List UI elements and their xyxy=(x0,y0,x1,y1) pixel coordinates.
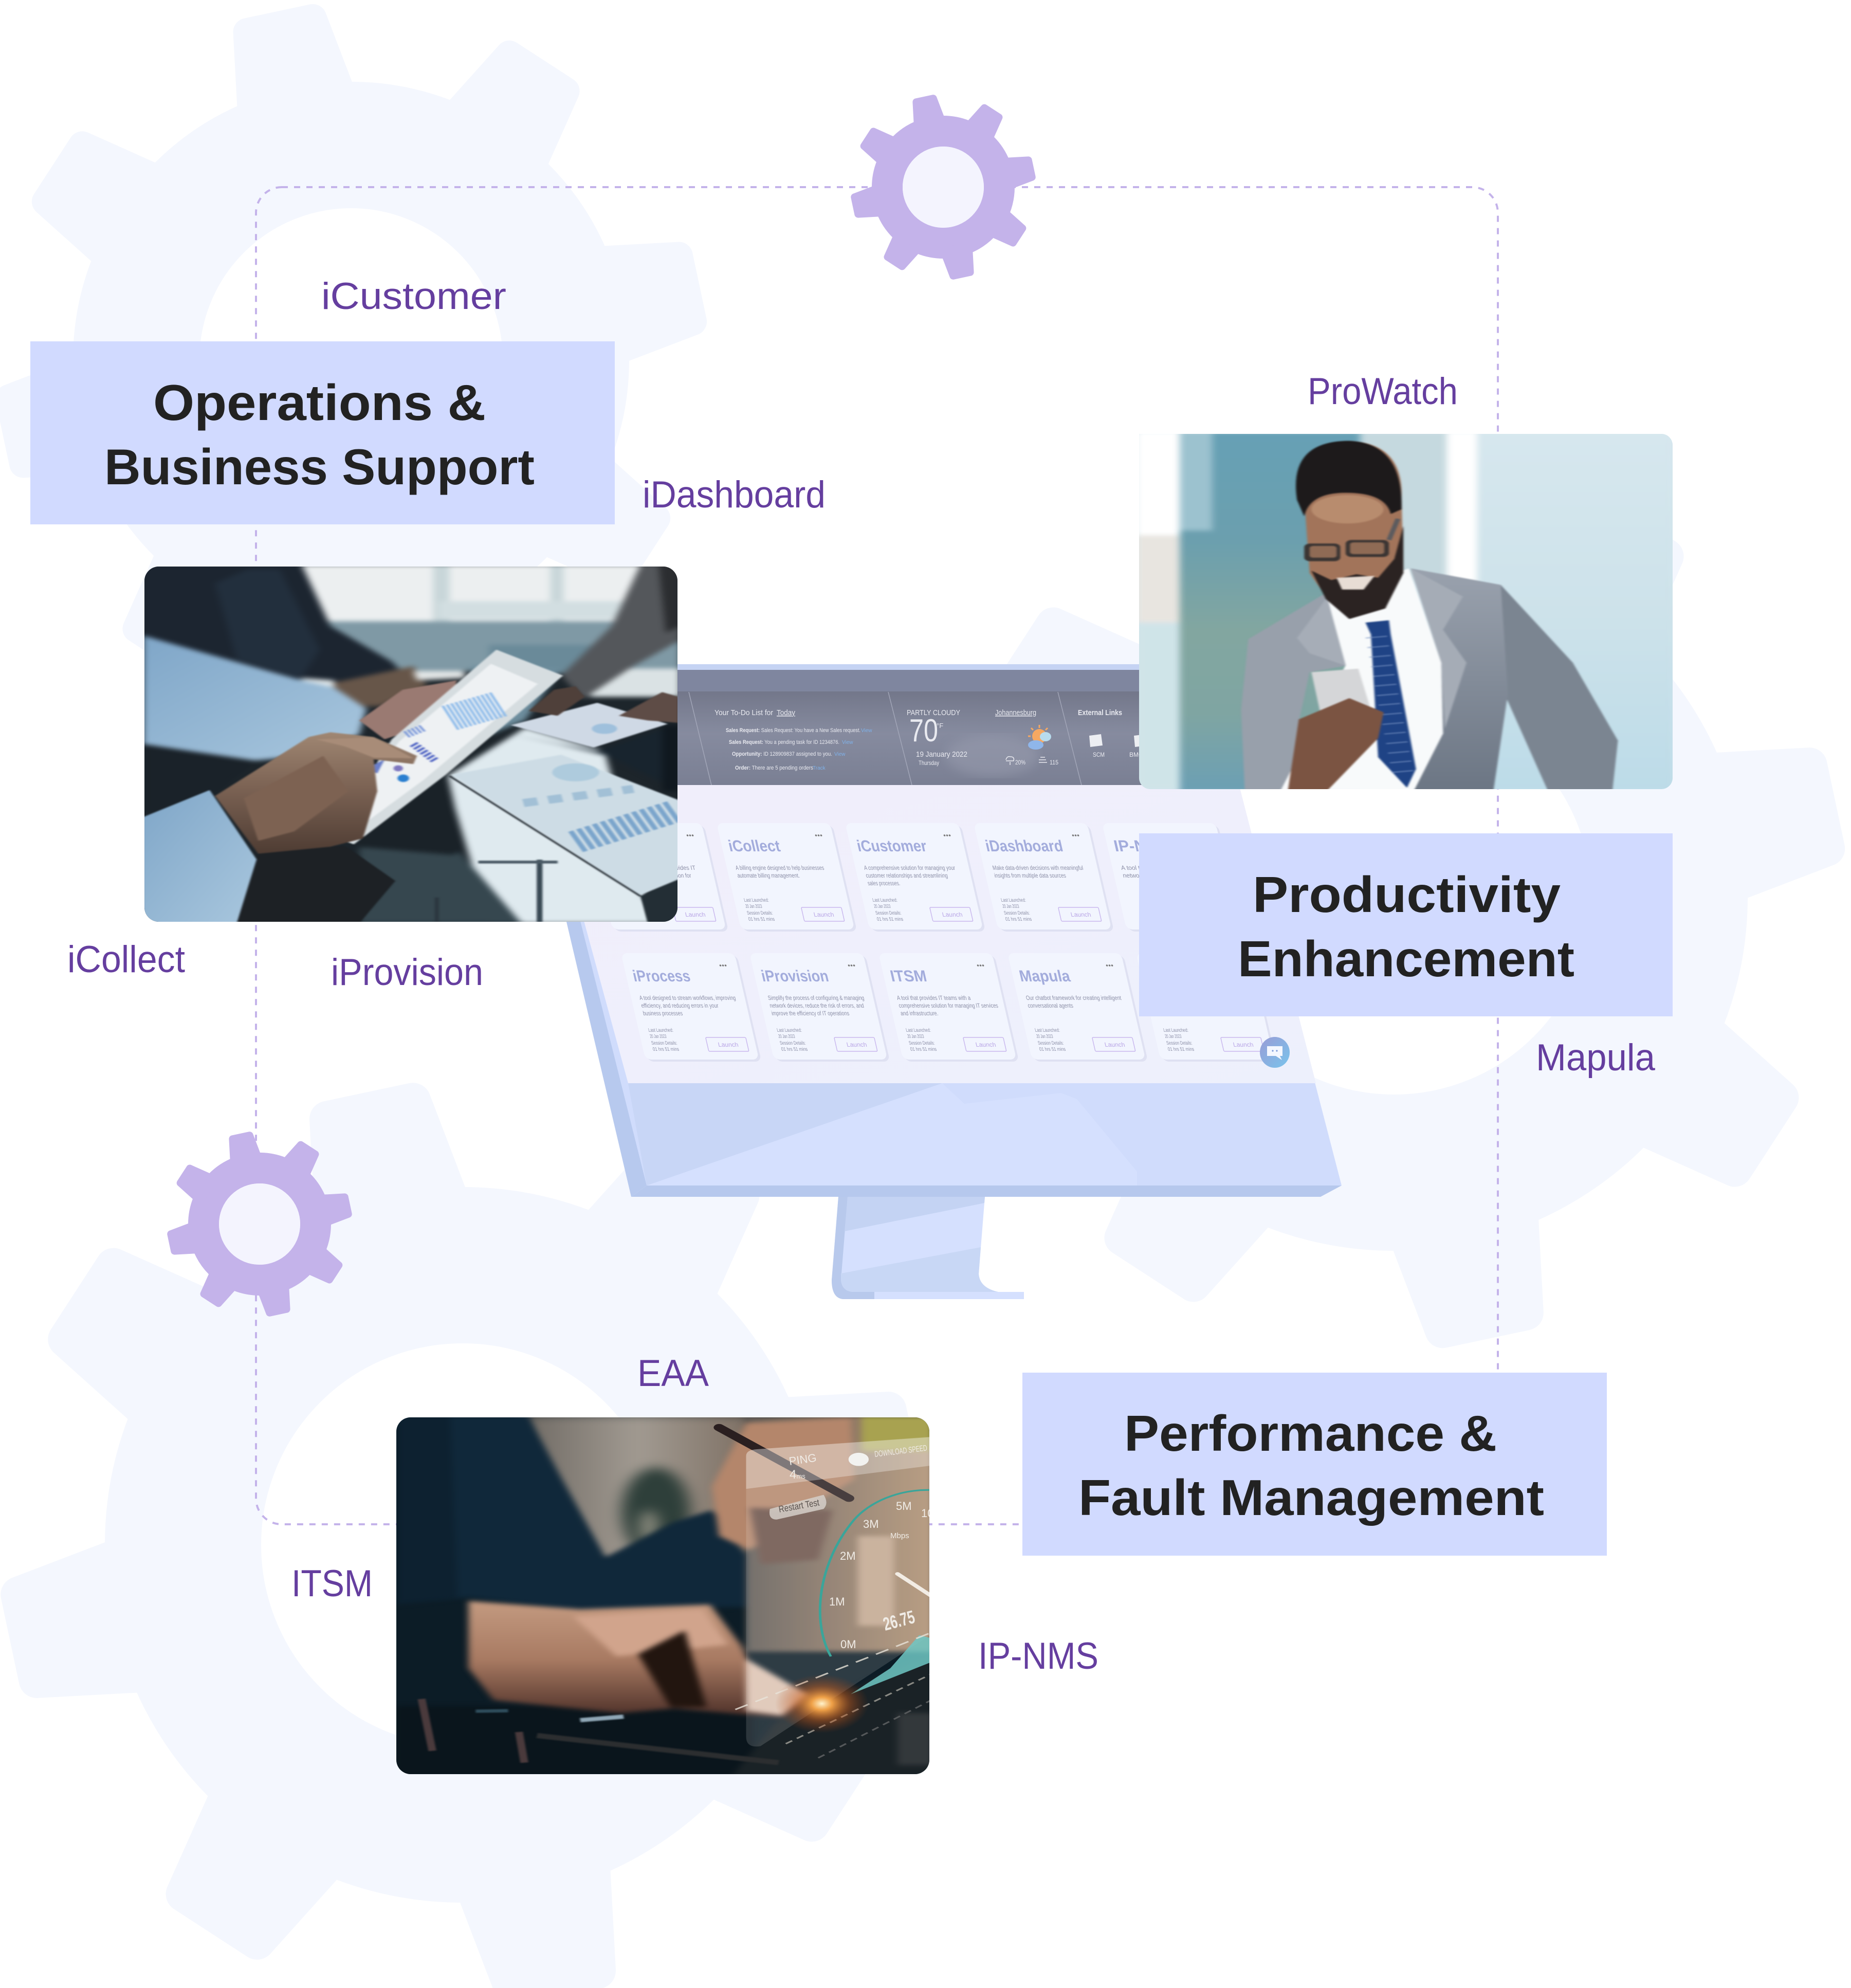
monitor front shaded facet xyxy=(628,1083,942,1185)
app card: Mapula: Session Details: xyxy=(1037,1041,1065,1046)
app card: iDashboard xyxy=(974,823,1114,932)
app card: iProcess: Session Details: xyxy=(651,1041,678,1046)
label: Mapula: Mapula xyxy=(1536,1037,1655,1079)
monitor illustration xyxy=(514,664,1342,1299)
app card: Mapula: Last Launched: xyxy=(1034,1028,1060,1033)
app card: iProvision: Last Launched: xyxy=(776,1028,802,1033)
app card: iDashboard: insights from multiple data sources xyxy=(994,872,1067,879)
app card: IP-NMS xyxy=(1102,823,1243,932)
speed test overlay text: 5M xyxy=(896,1500,912,1512)
app card: IP-NMS: IP-NMS xyxy=(1112,837,1172,855)
app card: iProvision: Session Details: xyxy=(779,1041,807,1046)
app card: ProWatch: Last Launched: xyxy=(1163,1028,1189,1033)
app card: iProvision: 01 hrs 51 mins xyxy=(781,1047,808,1052)
dashboard header xyxy=(677,664,1142,786)
label: iCollect: iCollect xyxy=(67,939,185,980)
app card: ITSM: Launch xyxy=(975,1041,997,1048)
app card: iCustomer: Launch xyxy=(941,911,963,918)
label: iCustomer: iCustomer xyxy=(321,276,506,317)
dashboard header: SCM xyxy=(1093,751,1105,758)
app card: ProWatch xyxy=(1136,953,1277,1062)
app card: ProWatch: 01 hrs 51 mins xyxy=(1167,1047,1195,1052)
app card: iProvision: improve the efficiency of IT operations xyxy=(771,1010,850,1017)
app card: ITSM: ITSM xyxy=(888,967,928,985)
app card: Mapula: Launch xyxy=(1104,1041,1126,1048)
app card: iCustomer xyxy=(856,826,984,932)
dashboard header: Track xyxy=(813,765,826,771)
app card: iProcess: Launch xyxy=(717,1041,739,1048)
app card: iCollect: Launch xyxy=(813,911,835,918)
speed test overlay text: 4ms xyxy=(790,1468,805,1482)
app card: EAA: Launch xyxy=(684,911,706,918)
dashboard header: Thursday xyxy=(919,759,939,767)
app card: iProvision: iProvision xyxy=(759,967,830,985)
app card: iCollect: A billing engine designed to help businesses xyxy=(735,864,825,871)
app card: Mapula: Our chatbot framework for creating intelligent xyxy=(1025,994,1122,1001)
dashboard header: View xyxy=(861,728,872,734)
app card: Mapula: 20 Jan 2023 xyxy=(1036,1034,1054,1039)
dashboard header: Today xyxy=(777,708,795,717)
app card: iProcess: 01 hrs 51 mins xyxy=(652,1047,680,1052)
app card: iProcess: A tool designed to stream workflows, improving xyxy=(638,994,737,1001)
speed test overlay text: 26.75 xyxy=(881,1606,917,1635)
heading box: Operations & Business Support: Business Support xyxy=(104,439,535,495)
app card: ITSM xyxy=(878,953,1019,1062)
monitor front lighter facet xyxy=(647,1083,1137,1185)
label: iProvision: iProvision xyxy=(331,952,483,993)
app card: ProWatch: Session Details: xyxy=(1166,1041,1193,1046)
app card: iCustomer: 01 hrs 51 mins xyxy=(876,917,904,922)
icon: gear left xyxy=(170,1135,349,1314)
heading box: Operations & Business Support: Operations & xyxy=(153,374,486,431)
app card: iProcess: iProcess xyxy=(631,967,692,985)
app card: Mapula: Mapula xyxy=(1017,967,1072,985)
app card: ProWatch: 20 Jan 2023 xyxy=(1164,1034,1182,1039)
app card: iCollect: iCollect xyxy=(726,837,782,855)
heading box: Performance & Fault Management: Fault Management xyxy=(1078,1469,1544,1526)
app card: ProWatch: ProWatch xyxy=(1146,967,1224,985)
app card: iDashboard: Session Details: xyxy=(1003,910,1031,916)
app card: iCollect: Session Details: xyxy=(746,910,774,916)
dashboard header: Sales Request: You a pending task for ID 1234876. xyxy=(729,739,839,745)
heading box: Performance & Fault Management: Performance & xyxy=(1124,1405,1497,1462)
app card: Mapula: 01 hrs 51 mins xyxy=(1039,1047,1066,1052)
app card: iDashboard: 01 hrs 51 mins xyxy=(1005,917,1032,922)
icon: weather xyxy=(1028,725,1051,750)
app card: iDashboard: Make data-driven decisions with meaningful xyxy=(992,864,1084,871)
app card: iCustomer: iCustomer xyxy=(855,837,928,855)
app card: EAA xyxy=(616,826,727,932)
speed test overlay text: 1M xyxy=(829,1595,845,1608)
app card: iDashboard: Last Launched: xyxy=(1000,898,1027,903)
dashboard header: Opportunity: ID 128909837 assigned to you. xyxy=(732,751,832,757)
app card: ITSM: 01 hrs 51 mins xyxy=(910,1047,937,1052)
speed test overlay text: PING xyxy=(788,1451,817,1468)
speed test overlay text: 0M xyxy=(840,1638,856,1651)
app card: iProcess xyxy=(621,953,762,1062)
app card: iProcess: 20 Jan 2023 xyxy=(649,1034,667,1039)
background gear: bottom left xyxy=(14,1097,911,1988)
app card: iDashboard: iDashboard xyxy=(983,837,1065,855)
dashboard header: 19 January 2022 xyxy=(916,750,967,759)
dashboard header: 70 xyxy=(909,713,938,749)
app card: iCollect xyxy=(728,826,856,932)
monitor stand xyxy=(832,1197,1024,1299)
dashboard header: View xyxy=(842,740,853,745)
app card: ITSM: and infrastructure. xyxy=(900,1010,939,1017)
monitor front face xyxy=(516,665,1342,1185)
app card: iCustomer: sales processes. xyxy=(867,880,901,887)
app card: EAA: business xyxy=(610,880,648,887)
app card: Mapula: conversational agents xyxy=(1027,1002,1074,1009)
app card: iProcess: business processes xyxy=(642,1010,684,1017)
app card: iCollect: 20 Jan 2023 xyxy=(745,904,763,909)
dashboard header: °F xyxy=(937,722,943,729)
app card: iCustomer: Last Launched: xyxy=(872,898,898,903)
app card: iProvision xyxy=(749,953,890,1062)
app card: EAA: A tool that simplifies and provides IT xyxy=(606,864,697,871)
label: IP-NMS: IP-NMS xyxy=(978,1635,1098,1677)
screen background xyxy=(584,785,1315,1083)
photo: man in suit using smartphone xyxy=(1137,431,1676,793)
dashboard header: Johannesburg xyxy=(995,708,1036,717)
app card: ProWatch: Launch xyxy=(1232,1041,1254,1048)
app card: iCollect: 01 hrs 51 mins xyxy=(748,917,775,922)
app card: iProvision: network devices, reduce the risk of errors, and xyxy=(769,1002,865,1009)
speed test overlay text: 3M xyxy=(863,1518,879,1530)
app card: iCustomer: 20 Jan 2023 xyxy=(873,904,891,909)
dashboard header: Sales Request: Sales Request: You have a New Sales request. xyxy=(726,727,860,734)
monitor screen xyxy=(584,664,1315,1083)
app card: ITSM: A tool that provides IT teams with a xyxy=(896,994,972,1001)
app card: ITSM: comprehensive solution for managing IT services xyxy=(898,1002,999,1009)
photo: team reviewing charts on tablet xyxy=(143,564,680,923)
app card: ITSM: Session Details: xyxy=(908,1041,936,1046)
icon: gear top xyxy=(854,98,1033,277)
app card: IP-NMS: network xyxy=(1122,872,1146,879)
app card: iProcess: efficiency, and reducing errors in your xyxy=(640,1002,719,1009)
dashboard header: PARTLY CLOUDY xyxy=(907,708,960,717)
background gear: right xyxy=(957,460,1831,1335)
speed test overlay text: 2M xyxy=(840,1549,856,1562)
app card: Mapula xyxy=(1007,953,1148,1062)
dashed connector loop xyxy=(256,187,1498,1524)
speed test overlay text: DOWNLOAD SPEED xyxy=(874,1444,928,1459)
app card: EAA: enterprise application automation for xyxy=(608,872,692,879)
icon: chat bubble xyxy=(1260,1037,1290,1068)
heading box: Productivity Enhancement: Productivity xyxy=(1253,866,1561,923)
dashboard header: Order: There are 5 pending orders xyxy=(735,765,813,771)
dashboard header: BMC xyxy=(1129,751,1143,758)
dashboard header: External Links xyxy=(1078,708,1122,717)
app card: iDashboard: 20 Jan 2023 xyxy=(1002,904,1020,909)
app card: iProvision: Simplify the process of configuring & managing xyxy=(767,994,865,1001)
heading box: Performance & Fault Management xyxy=(1022,1373,1607,1556)
app card: iCustomer: A comprehensive solution for managing your xyxy=(863,864,956,871)
app card: iCustomer: Session Details: xyxy=(875,910,902,916)
speed test overlay text xyxy=(778,1444,933,1651)
label: iDashboard: iDashboard xyxy=(643,474,826,516)
heading box: Productivity Enhancement: Enhancement xyxy=(1238,931,1574,987)
app card: iDashboard: Launch xyxy=(1070,911,1092,918)
app card: EAA: EAA xyxy=(598,837,636,855)
dashboard header: Your To-Do List for xyxy=(714,708,773,717)
dashboard header: 115 xyxy=(1050,759,1058,766)
photo: hands on laptop with speed test overlay xyxy=(396,1413,933,1777)
icon: SCM tile xyxy=(1089,734,1103,747)
label: EAA: EAA xyxy=(637,1353,709,1394)
app card: IP-NMS: A tool that xyxy=(1120,864,1150,871)
speed test overlay text: Restart Test xyxy=(778,1497,820,1515)
app card: iProvision: 20 Jan 2023 xyxy=(778,1034,796,1039)
speed test overlay text: 10 xyxy=(921,1507,933,1520)
app card: iCollect: automate billing management. xyxy=(737,872,800,879)
app card: iCustomer: customer relationships and streamlining xyxy=(865,872,948,879)
speed test overlay text: Mbps xyxy=(890,1531,909,1540)
background gear: top left xyxy=(6,14,697,705)
label: ProWatch: ProWatch xyxy=(1308,371,1458,412)
heading box: Productivity Enhancement xyxy=(1139,833,1673,1016)
app card: iProcess: Last Launched: xyxy=(648,1028,674,1033)
label: ITSM: ITSM xyxy=(291,1563,373,1604)
dashboard header: 20% xyxy=(1015,759,1025,766)
app card: iCollect: Last Launched: xyxy=(743,898,769,903)
dashboard header: View xyxy=(834,752,846,757)
monitor bottom lip xyxy=(631,1185,1342,1197)
heading box: Operations & Business Support xyxy=(30,341,615,524)
monitor side edge xyxy=(566,922,647,1197)
app card: iProvision: Launch xyxy=(846,1041,868,1048)
app card: ITSM: 20 Jan 2023 xyxy=(907,1034,925,1039)
app card: ITSM: Last Launched: xyxy=(905,1028,931,1033)
